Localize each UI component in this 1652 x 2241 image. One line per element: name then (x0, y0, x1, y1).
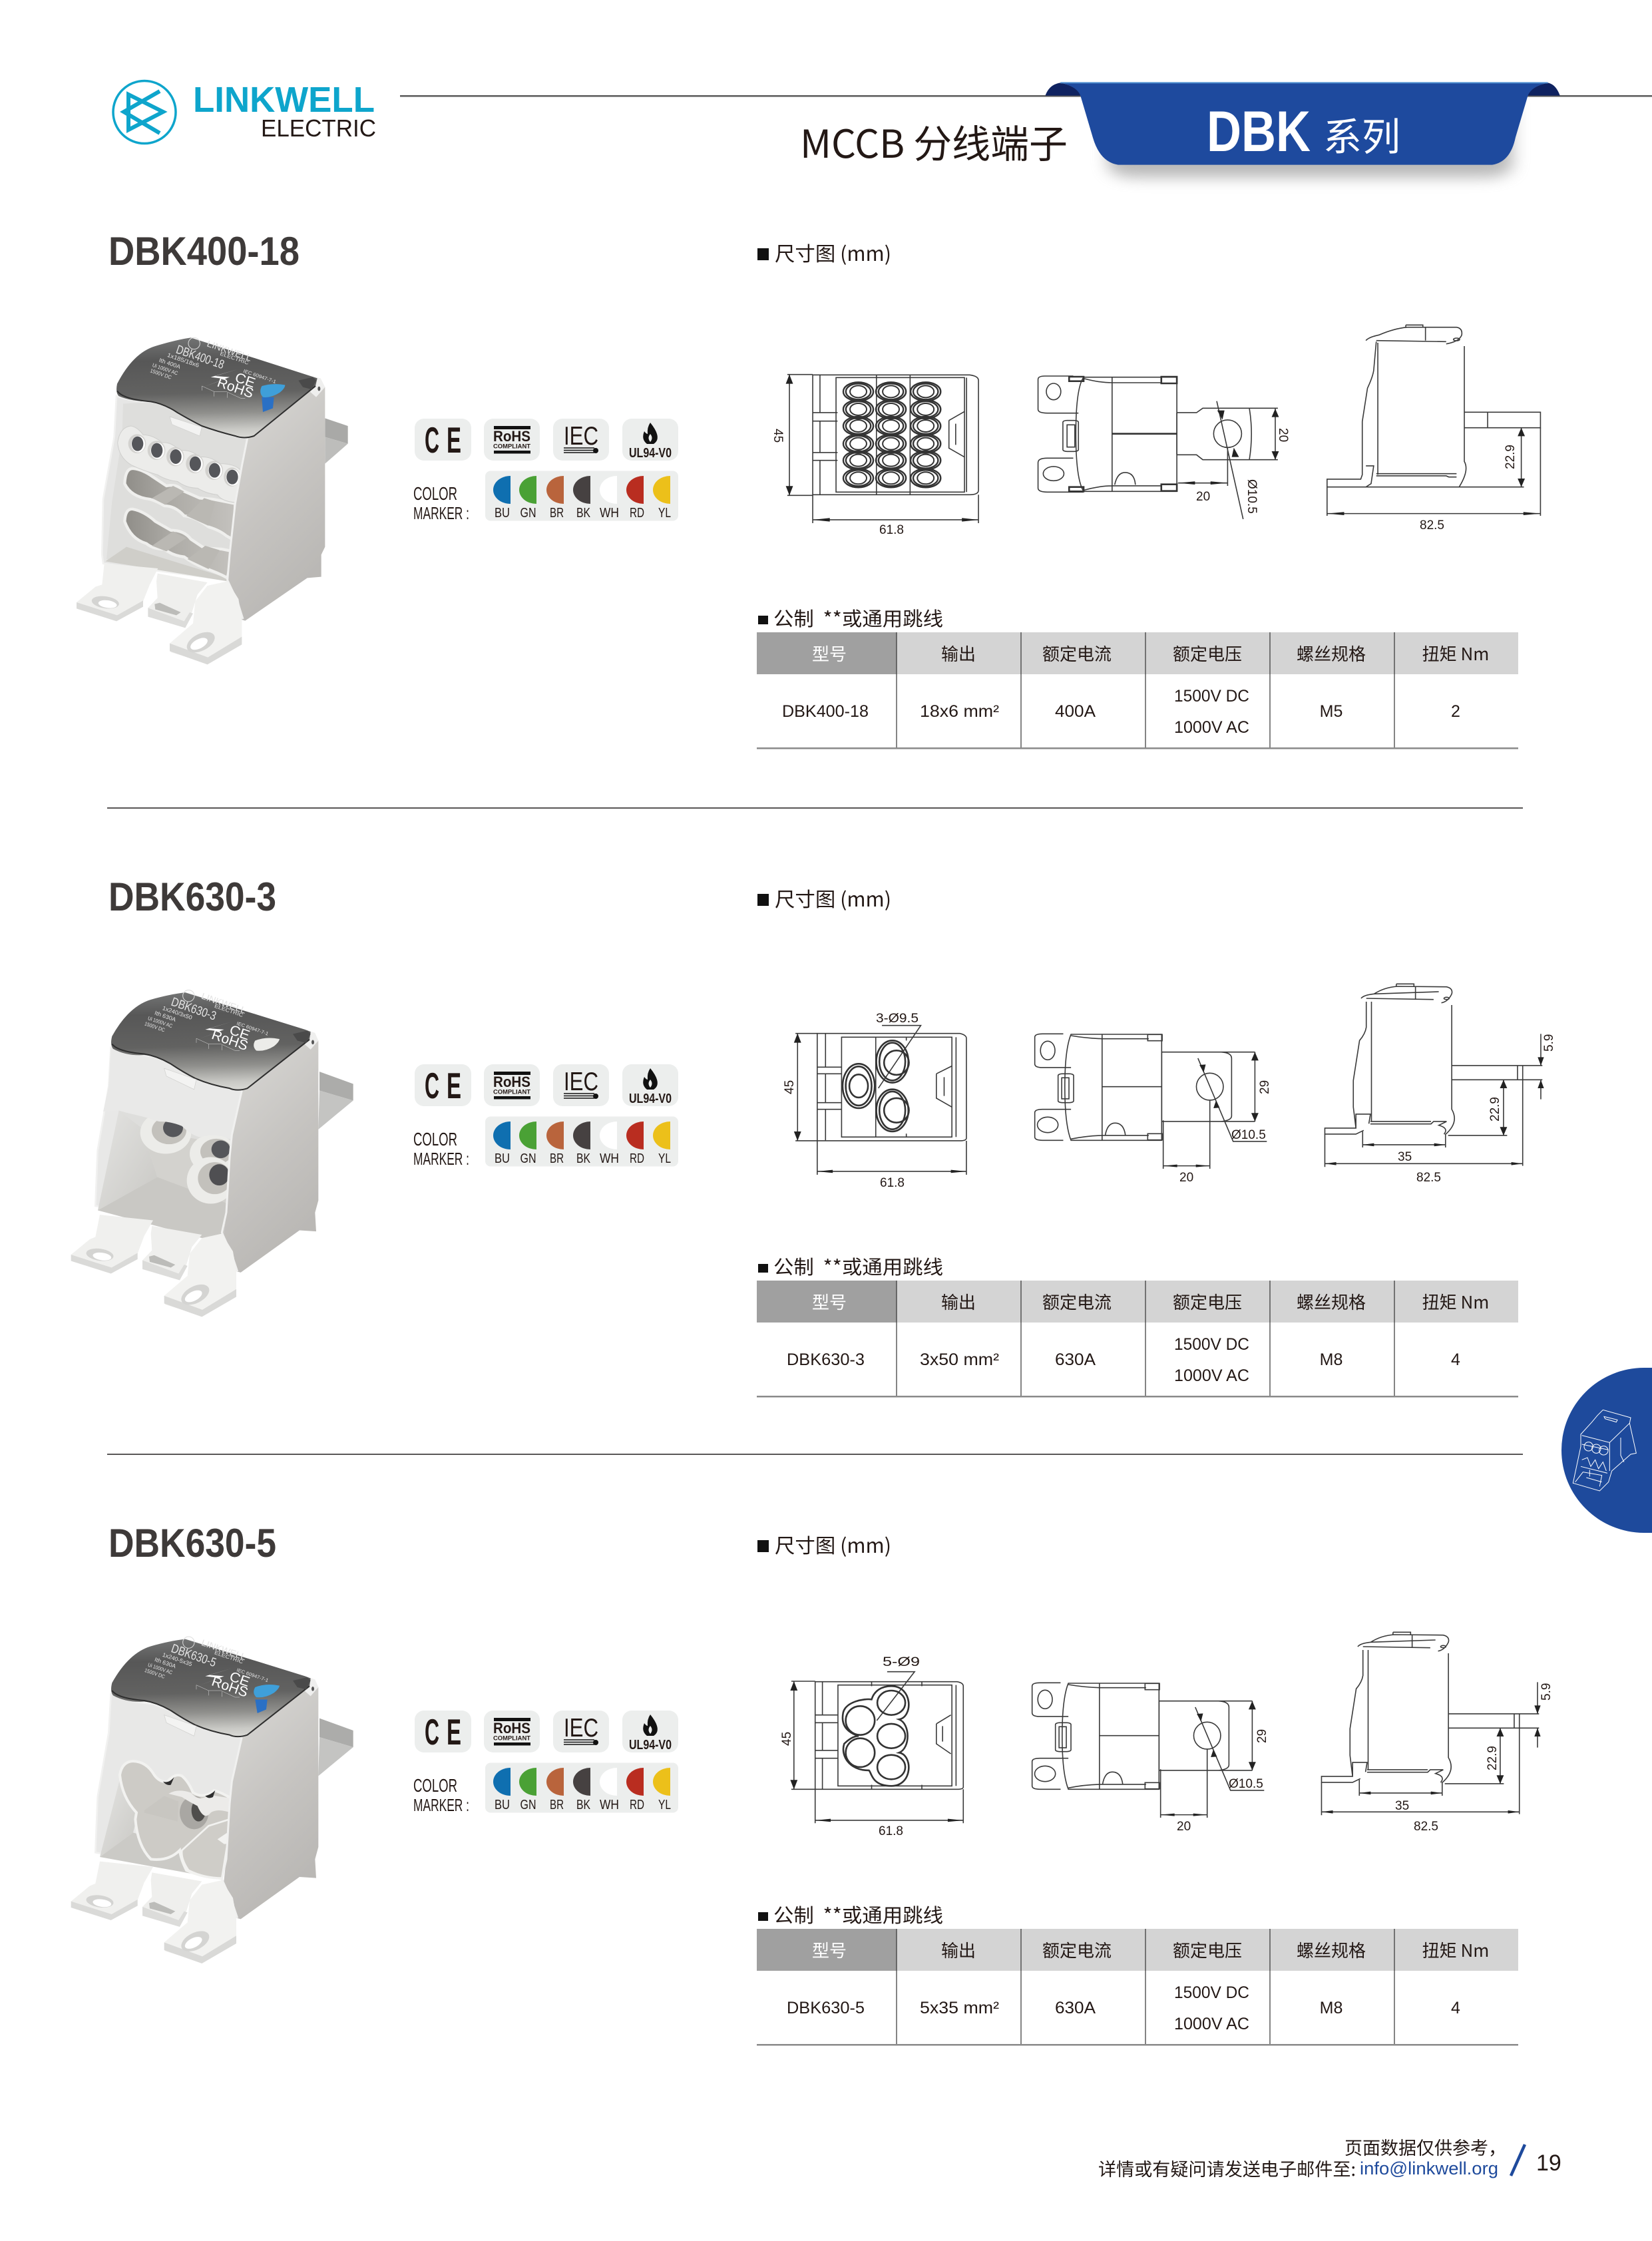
lid markings: DBK630-3: RoHS (210, 1027, 250, 1054)
drawing: top view, DBK630-5 (790, 1672, 963, 1823)
footer note: 页面数据仅供参考， (1344, 2134, 1506, 2160)
table label: 公制 **或通用跳线 (773, 1252, 943, 1280)
certification badges: E (447, 1711, 461, 1752)
spec table: DBK630-3: 型号 (812, 1289, 847, 1314)
color marker: WH (600, 1798, 619, 1812)
dimension numbers: DBK630-5: 20 (1177, 1820, 1191, 1834)
lid markings: DBK400-18 (149, 337, 277, 401)
product photo: DBK400-18 (77, 337, 348, 664)
section 2: DBK630-3 (71, 875, 1556, 1398)
lid markings: DBK400-18: Ith 400A (158, 357, 182, 370)
color marker: YL (658, 506, 671, 520)
certification badges: IEC (564, 1714, 598, 1742)
spec table: DBK400-18 (757, 632, 1518, 749)
dimension numbers: DBK630-5: 29 (1255, 1729, 1269, 1743)
spec table: DBK630-5: 4 (1451, 1999, 1460, 2017)
spec table: DBK630-3: 3x50 mm² (920, 1350, 999, 1369)
certification badges (415, 1064, 678, 1106)
lid markings: DBK630-5: Ui 1000V AC (147, 1662, 173, 1676)
drawing: top view, DBK630-3 (794, 1026, 966, 1175)
spec table: DBK630-5: 额定电压 (1173, 1937, 1242, 1962)
color marker: BK (576, 1151, 591, 1166)
dimension numbers: DBK630-3: 20 (1179, 1171, 1193, 1185)
spec table: DBK400-18: 额定电压 (1173, 641, 1242, 666)
color marker: BK (576, 1798, 591, 1812)
certification badges: E (447, 1065, 461, 1106)
color marker: BR (550, 1798, 564, 1812)
heading: DBK630-5 (108, 1521, 276, 1565)
footer note (1098, 2134, 1506, 2181)
side tab with product icon (1561, 1368, 1652, 1533)
lid markings: DBK400-18: 1500V DC (149, 367, 172, 381)
spec table: DBK630-5: 型号 (812, 1937, 847, 1962)
dimension numbers: DBK400-18: 20 (1276, 428, 1290, 442)
lid markings: DBK630-3: 1x240/3x50 (162, 1004, 193, 1021)
color marker: COLOR (413, 1775, 457, 1796)
dimension heading: 尺寸图 (mm) (775, 238, 891, 267)
dimension numbers: DBK630-3: 82.5 (1416, 1171, 1441, 1185)
lid markings: DBK630-5: ELECTRIC (214, 1649, 244, 1665)
dimension numbers: DBK630-5: 82.5 (1414, 1820, 1438, 1834)
certification badges: UL94-V0 (629, 1092, 672, 1106)
lid markings: DBK630-3: Ui 1000V AC (147, 1015, 173, 1029)
spec table: DBK630-3: 输出 (941, 1289, 976, 1314)
spec table: DBK630-3: 扭矩 Nm (1422, 1289, 1489, 1314)
page number: 19 (1536, 2150, 1561, 2176)
certification badges: IEC (564, 422, 598, 451)
color marker: MARKER : (413, 503, 469, 523)
color marker: GN (520, 506, 536, 520)
subtitle: MCCB 分线端子 (800, 113, 1068, 169)
spec table: DBK630-5: 5x35 mm² (920, 1999, 999, 2017)
dimension numbers: DBK400-18 (771, 428, 1518, 537)
lid markings: DBK630-5: DBK630-5 (170, 1641, 218, 1669)
dimension numbers: DBK400-18: 45 (771, 429, 785, 443)
certification badges: COMPLIANT (493, 1089, 530, 1096)
spec table: DBK630-5: DBK630-5 (787, 1999, 865, 2017)
dimension numbers: DBK630-5: 5-Ø9 (883, 1655, 920, 1669)
lid markings: DBK630-3 (144, 990, 270, 1054)
spec table: DBK400-18: M5 (1320, 702, 1342, 721)
spec table: DBK630-5: 630A (1055, 1999, 1096, 2017)
dimension numbers: DBK630-5: 22.9 (1486, 1746, 1500, 1770)
certification badges: RoHS (493, 1074, 530, 1090)
color marker: MARKER : (413, 1795, 469, 1815)
lid markings: DBK400-18: CE (233, 370, 258, 391)
lid markings: DBK400-18: 1x185/18x6 (166, 351, 200, 369)
dimension numbers: DBK630-5: 45 (780, 1732, 794, 1746)
dimension numbers: DBK630-3: 61.8 (880, 1176, 905, 1190)
lid markings: DBK400-18: ELECTRIC (219, 351, 250, 366)
spec table: DBK630-3: 额定电流 (1042, 1289, 1112, 1314)
color marker: RD (630, 506, 644, 520)
dimension numbers: DBK400-18: 22.9 (1504, 445, 1518, 469)
icon: terminal block outline (1573, 1410, 1636, 1491)
dimension numbers: DBK630-3: 29 (1258, 1080, 1272, 1094)
drawing: bottom view, DBK630-5 (1032, 1683, 1264, 1818)
lid markings: DBK630-5: Ith 630A (154, 1656, 177, 1669)
spec table: DBK630-3: M8 (1320, 1350, 1342, 1369)
ribbon: DBK series: DBK (1207, 100, 1311, 164)
certification badges: COMPLIANT (493, 443, 530, 450)
color marker: BR (550, 1151, 564, 1166)
dimension numbers: DBK630-3: 45 (783, 1080, 797, 1094)
color marker: BU (495, 506, 510, 520)
footer (1098, 2134, 1561, 2181)
dimension numbers: DBK630-5 (780, 1655, 1553, 1838)
color marker (413, 1117, 678, 1169)
section 3: DBK630-5 (71, 1521, 1553, 2046)
lid markings: DBK630-5 (144, 1637, 270, 1701)
table label: 公制 **或通用跳线 (773, 1900, 943, 1928)
certification badges: UL94-V0 (629, 1738, 672, 1752)
lid markings: DBK630-3: ELECTRIC (214, 1003, 244, 1018)
spec table: DBK400-18: 扭矩 Nm (1422, 641, 1489, 666)
dimension numbers: DBK630-5: 35 (1395, 1799, 1409, 1813)
color marker: BK (576, 506, 591, 520)
lid markings: DBK400-18: DBK400-18 (174, 342, 226, 371)
spec table: DBK630-5: 扭矩 Nm (1422, 1937, 1489, 1962)
color marker: MARKER : (413, 1149, 469, 1169)
spec table: DBK630-3: 1000V AC (1174, 1366, 1249, 1385)
spec table: DBK630-5: M8 (1320, 1999, 1342, 2017)
drawing: top view, DBK400-18 (786, 375, 978, 523)
lid markings: DBK400-18: RoHS (215, 375, 256, 401)
dimension numbers: DBK630-5: 61.8 (879, 1824, 903, 1838)
certification badges (415, 419, 678, 461)
color marker (413, 1762, 678, 1815)
page number (1511, 2144, 1561, 2176)
color marker (413, 471, 678, 523)
certification badges: C (425, 419, 439, 461)
certification badges: RoHS (493, 428, 530, 445)
header (113, 80, 1652, 178)
spec table: DBK630-3: 4 (1451, 1350, 1460, 1369)
color marker: BU (495, 1798, 510, 1812)
lid markings: DBK400-18: Ui 1000V AC (152, 362, 179, 377)
drawing: bottom view, DBK630-3 (1035, 1034, 1267, 1169)
spec table: DBK400-18: 螺丝规格 (1297, 641, 1366, 666)
dimension numbers: DBK400-18: 20 (1196, 490, 1210, 504)
lid markings: DBK630-3: Ith 630A (154, 1010, 177, 1023)
color marker: WH (600, 1151, 619, 1166)
color marker: GN (520, 1798, 536, 1812)
dimension numbers: DBK630-3: Ø10.5 (1231, 1128, 1266, 1142)
spec table: DBK630-5: 输出 (941, 1937, 976, 1962)
heading: DBK400-18 (108, 229, 300, 274)
spec table: DBK630-3 (757, 1281, 1518, 1398)
spec table: DBK630-3: 630A (1055, 1350, 1096, 1369)
color marker: BR (550, 506, 564, 520)
drawing: side view, DBK400-18 (1327, 325, 1540, 516)
spec table: DBK630-3: 螺丝规格 (1297, 1289, 1366, 1314)
color marker: GN (520, 1151, 536, 1166)
drawing: side view, DBK630-5 (1321, 1632, 1541, 1815)
dimension numbers: DBK630-5: 5.9 (1540, 1683, 1553, 1701)
lid markings: DBK630-5: 1500V DC (144, 1667, 166, 1680)
color marker: COLOR (413, 483, 457, 504)
dimension numbers: DBK630-3: 22.9 (1488, 1097, 1502, 1121)
spec table: DBK630-5: 1000V AC (1174, 2015, 1249, 2033)
dimension numbers: DBK630-3: 5.9 (1542, 1034, 1556, 1052)
spec table: DBK630-5: 额定电流 (1042, 1937, 1112, 1962)
lid markings: DBK400-18: LINKWELL (206, 339, 253, 363)
dimension numbers: DBK400-18: 61.8 (879, 523, 904, 537)
color marker: YL (658, 1151, 671, 1166)
table label: 公制 **或通用跳线 (773, 604, 943, 632)
section 1: DBK400-18 (77, 229, 1540, 749)
lid markings: DBK630-3: IEC 60947-7-1 (236, 1020, 270, 1037)
spec table: DBK630-3: 额定电压 (1173, 1289, 1242, 1314)
spec table: DBK630-3: 1500V DC (1174, 1335, 1249, 1354)
color marker: WH (600, 506, 619, 520)
dimension numbers: DBK630-3: 35 (1398, 1150, 1412, 1164)
spec table: DBK400-18: 型号 (812, 641, 847, 666)
certification badges: RoHS (493, 1720, 530, 1736)
heading: DBK630-3 (108, 875, 276, 919)
dimension numbers: DBK630-3 (783, 1012, 1556, 1190)
spec table: DBK630-5 (757, 1929, 1518, 2046)
certification badges: C (425, 1065, 439, 1106)
lid markings: DBK630-3: 1500V DC (144, 1021, 166, 1033)
ribbon: DBK series: 系列 (1323, 106, 1400, 162)
lid markings: DBK630-5: RoHS (210, 1674, 250, 1701)
lid markings: DBK630-5: LINKWELL (200, 1637, 248, 1662)
lid markings: DBK630-3: CE (228, 1022, 252, 1044)
footer note: 详情或有疑问请发送电子邮件至: (1098, 2155, 1356, 2181)
certification badges: COMPLIANT (493, 1734, 530, 1742)
spec table: DBK400-18: 400A (1055, 702, 1096, 721)
spec table: DBK400-18: 输出 (941, 641, 976, 666)
spec table: DBK630-5: 螺丝规格 (1297, 1937, 1366, 1962)
product photo: DBK630-5 (71, 1637, 353, 1963)
logo: Linkwell Electric: LINKWELL (193, 80, 375, 120)
certification badges: E (447, 419, 461, 461)
dimension numbers: DBK400-18: 82.5 (1420, 518, 1444, 532)
spec table: DBK400-18: 1500V DC (1174, 687, 1249, 706)
certification badges: UL94-V0 (629, 446, 672, 461)
logo: Linkwell Electric: ELECTRIC (261, 114, 376, 142)
spec table: DBK400-18: 18x6 mm² (920, 702, 999, 721)
lid markings: DBK630-3: DBK630-3 (170, 994, 218, 1023)
color marker: BU (495, 1151, 510, 1166)
footer note: info@linkwell.org (1360, 2158, 1498, 2178)
product photo: DBK630-3 (71, 990, 353, 1317)
spec table: DBK630-5: 1500V DC (1174, 1983, 1249, 2002)
color marker: RD (630, 1798, 644, 1812)
dimension numbers: DBK400-18: Ø10.5 (1245, 479, 1259, 514)
color marker: COLOR (413, 1129, 457, 1149)
dimension numbers: DBK630-3: 3-Ø9.5 (876, 1012, 919, 1026)
certification badges: C (425, 1711, 439, 1752)
lid markings: DBK630-5: IEC 60947-7-1 (236, 1667, 270, 1683)
dimension numbers: DBK630-5: Ø10.5 (1229, 1777, 1263, 1791)
lid markings: DBK630-3: LINKWELL (200, 991, 248, 1016)
drawing: bottom view, DBK400-18 (1038, 376, 1279, 519)
spec table: DBK400-18: DBK400-18 (782, 702, 869, 721)
lid markings: DBK630-5: 1x240-5x35 (162, 1651, 193, 1667)
certification badges (415, 1711, 678, 1752)
spec table: DBK400-18: 1000V AC (1174, 718, 1249, 737)
drawing: side view, DBK630-3 (1325, 984, 1544, 1167)
lid markings: DBK630-5: CE (228, 1669, 252, 1690)
dimension heading: 尺寸图 (mm) (775, 883, 891, 913)
color marker: YL (658, 1798, 671, 1812)
spec table: DBK400-18: 2 (1451, 702, 1460, 721)
lid markings: DBK400-18: IEC 60947-7-1 (242, 368, 277, 385)
spec table: DBK630-3: DBK630-3 (787, 1350, 865, 1369)
color marker: RD (630, 1151, 644, 1166)
dimension heading: 尺寸图 (mm) (775, 1529, 891, 1559)
logo: Linkwell Electric (113, 80, 376, 144)
certification badges: IEC (564, 1068, 598, 1096)
ribbon: DBK series (1045, 83, 1560, 178)
spec table: DBK400-18: 额定电流 (1042, 641, 1112, 666)
